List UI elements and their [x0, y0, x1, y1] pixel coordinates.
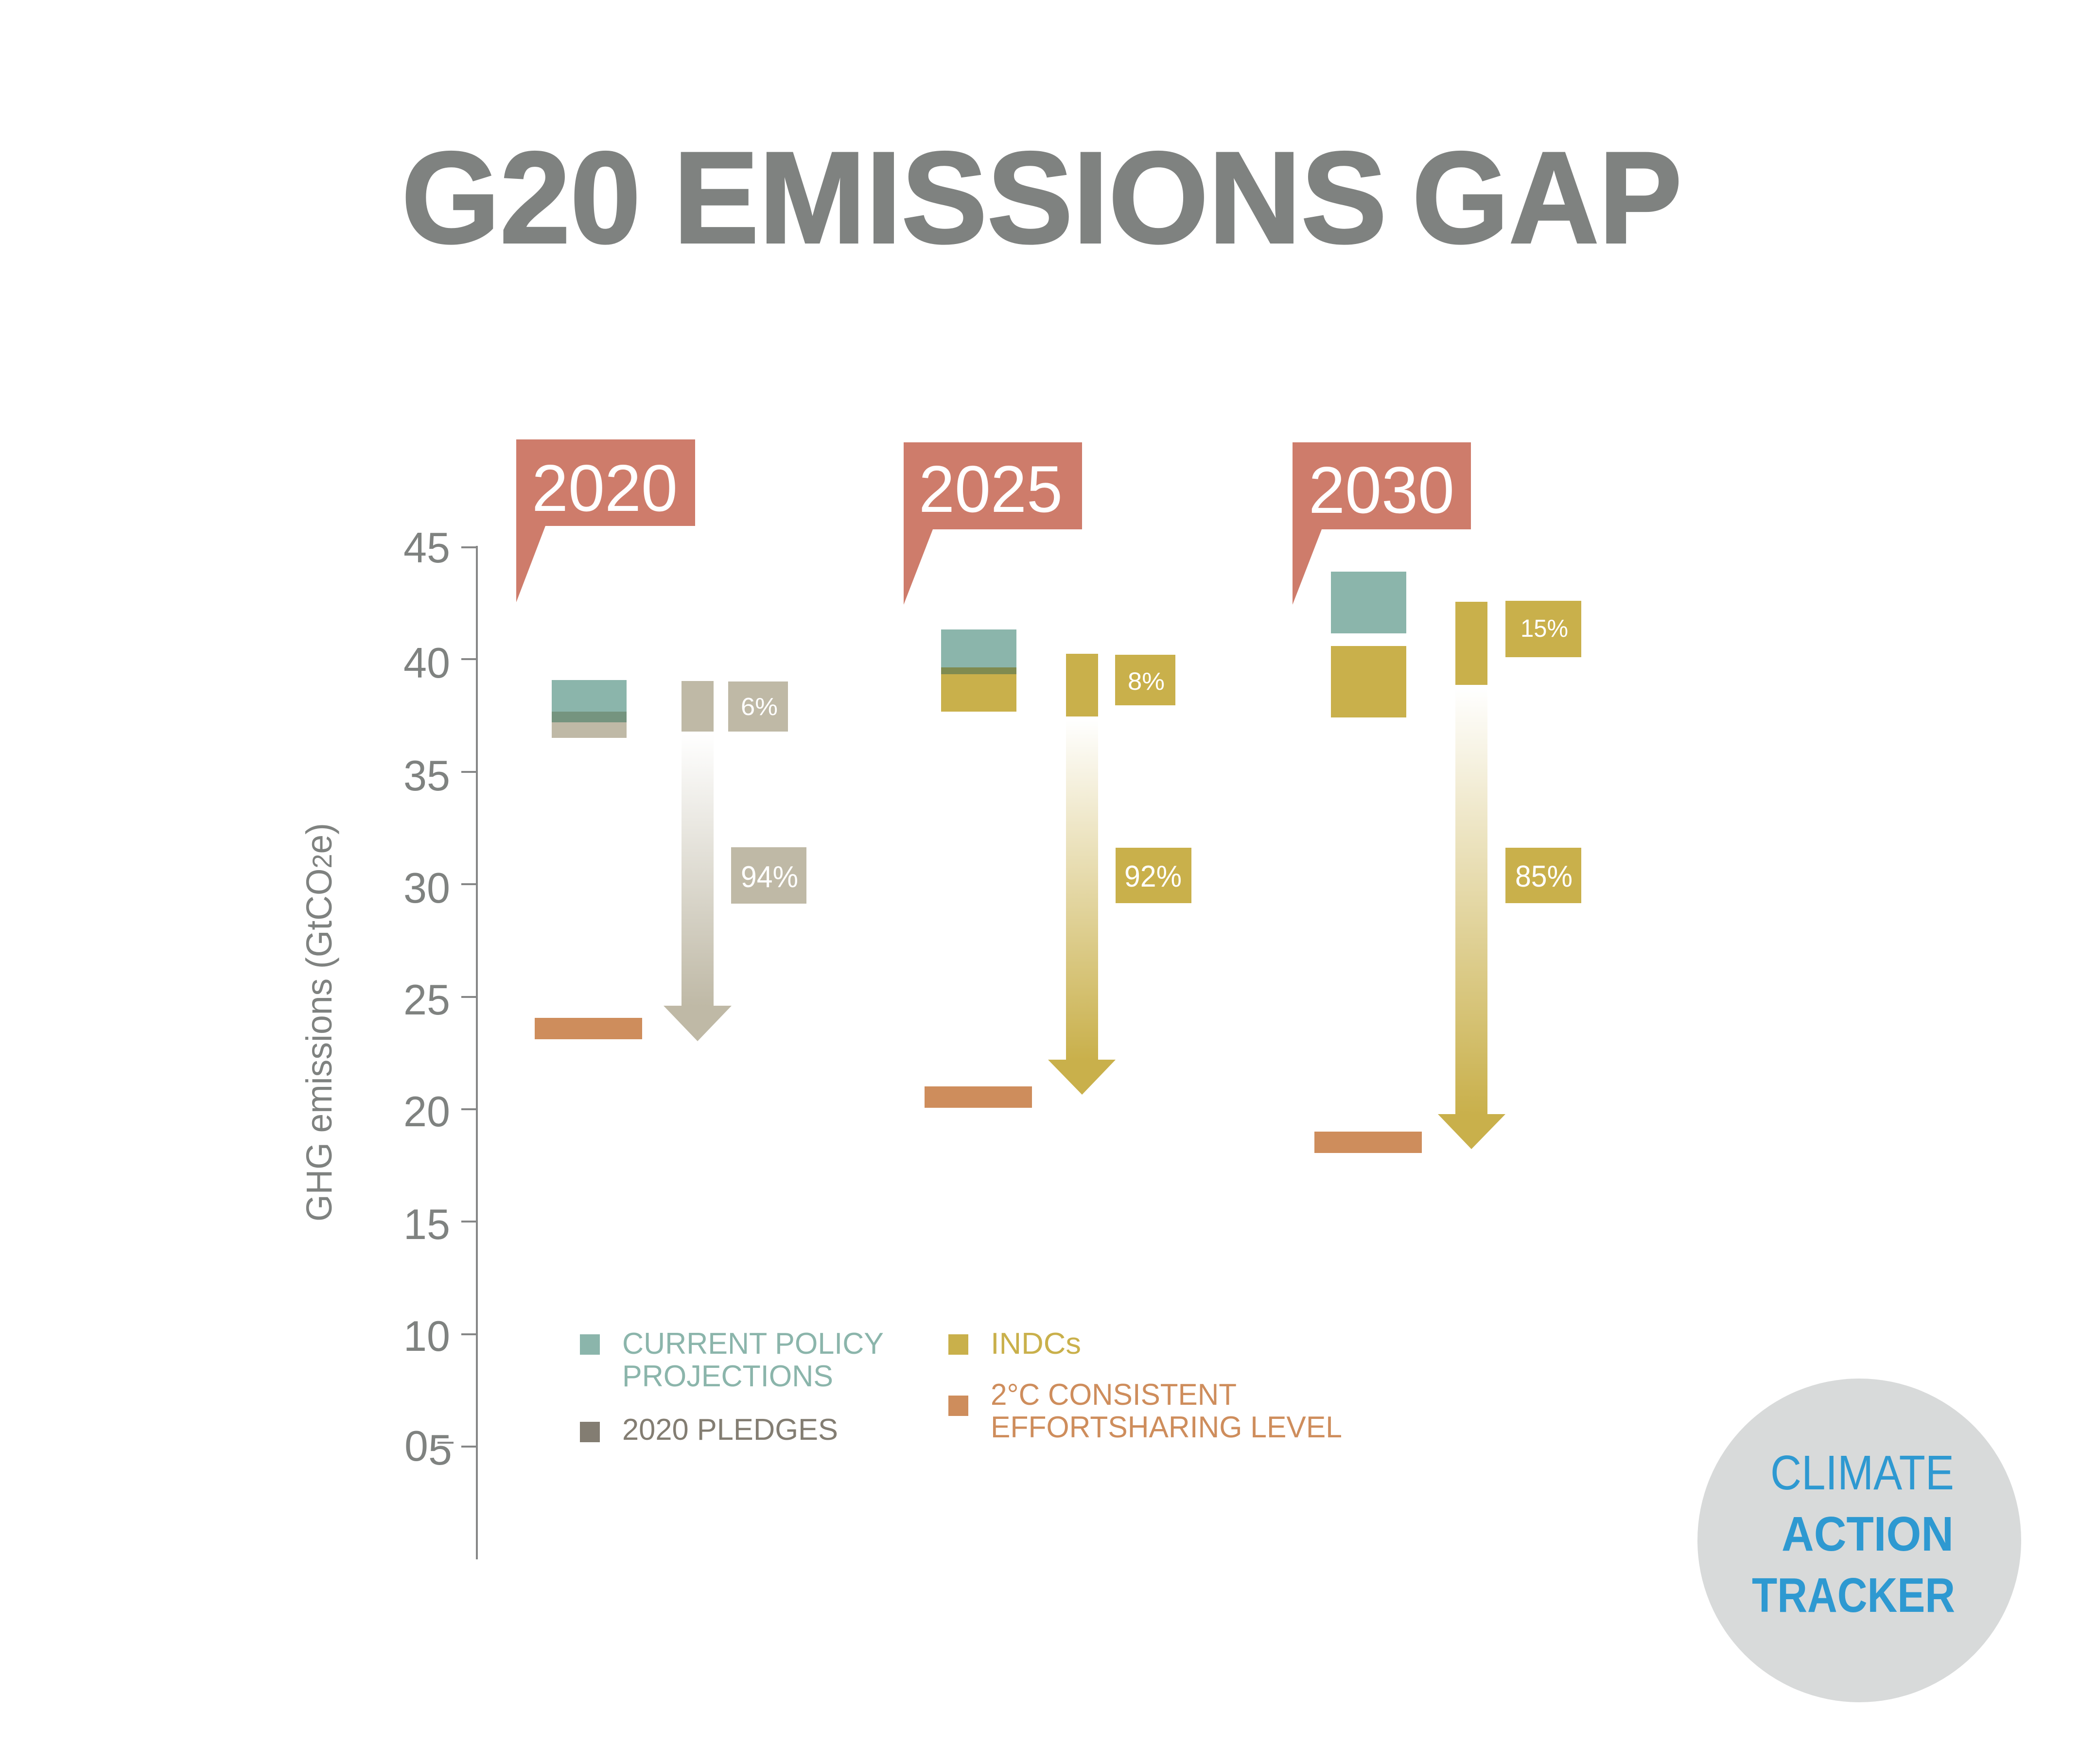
arrow: 2030 gap [1438, 602, 1505, 1149]
axis tick labels: 5 [428, 1426, 452, 1474]
logo: Climate Action Tracker: TRACKER [1752, 1568, 1955, 1623]
logo: Climate Action Tracker: CLIMATE [1770, 1446, 1954, 1500]
callout: 6% [728, 681, 788, 732]
title: EMISSIONS [673, 124, 1387, 270]
flag: 2030 [1293, 442, 1471, 605]
title [402, 124, 1682, 270]
logo: Climate Action Tracker [1697, 1379, 2021, 1702]
panel: 2030 [1293, 442, 1581, 1153]
callout: 92%: 92% [1124, 860, 1182, 893]
arrow: 2020 gap [664, 681, 732, 1041]
axis tick labels: 45 [403, 524, 450, 572]
bar: 2030 two degree level [1314, 1132, 1422, 1153]
callout: 92% [1116, 848, 1191, 903]
callout: 94% [731, 847, 806, 904]
axis tick labels: 15 [403, 1200, 450, 1248]
legend item: current policy projections: CURRENT POLICY [622, 1327, 884, 1361]
axis tick labels: 25 [403, 976, 450, 1024]
logo: Climate Action Tracker: ACTION [1782, 1507, 1954, 1561]
y axis [403, 524, 478, 1559]
arrow: 2025 gap [1048, 654, 1116, 1095]
bar: 2025 two degree level [925, 1086, 1032, 1108]
panel: 2020 [516, 439, 806, 1041]
callout: 94%: 94% [741, 860, 798, 894]
bar: 2030 current policy [1331, 572, 1406, 633]
axis tick labels: 40 [403, 639, 450, 687]
panel: 2025 [904, 442, 1191, 1108]
flag: 2030: 2030 [1309, 453, 1454, 527]
legend item: INDCs: INDCs [991, 1327, 1081, 1361]
callout: 8%: 8% [1128, 667, 1165, 695]
legend item: current policy projections: PROJECTIONS [622, 1360, 833, 1393]
callout: 6%: 6% [741, 693, 778, 720]
flag: 2025 [904, 442, 1082, 605]
flag: 2025: 2025 [919, 452, 1063, 526]
callout: 8% [1115, 655, 1175, 705]
axis tick labels: 35 [403, 751, 450, 800]
legend item: 2020 pledges: 2020 PLEDGES [622, 1413, 838, 1447]
legend [580, 1327, 1342, 1447]
flag: 2020 [516, 439, 695, 602]
callout: 15%: 15% [1521, 614, 1568, 642]
bars: 2020 stacked ranges [552, 680, 627, 738]
axis tick labels [403, 524, 452, 1474]
legend item: two degree consistent level: EFFORTSHARING LEVEL [991, 1411, 1342, 1444]
title: G20 [402, 124, 641, 270]
callout: 85%: 85% [1515, 860, 1573, 893]
axis tick labels: 30 [403, 864, 450, 912]
callout: 15% [1505, 601, 1581, 657]
legend item: current policy projections [580, 1327, 884, 1393]
axis tick labels: 20 [403, 1087, 450, 1135]
legend item: two degree consistent level [948, 1378, 1342, 1444]
bar: 2020 two degree level [535, 1018, 642, 1039]
axis tick labels: 0 [404, 1422, 428, 1470]
bar: 2030 INDCs [1331, 646, 1406, 717]
axis tick labels: 10 [403, 1312, 450, 1360]
bars: 2025 stacked ranges [941, 629, 1016, 712]
legend item: INDCs [948, 1327, 1081, 1361]
title: GAP [1412, 124, 1682, 270]
callout: 85% [1505, 848, 1581, 903]
legend item: two degree consistent level: 2°C CONSISTENT [991, 1378, 1237, 1412]
y axis title: GHG emissions (GtCO2e) [299, 823, 339, 1222]
flag: 2020: 2020 [532, 451, 678, 525]
